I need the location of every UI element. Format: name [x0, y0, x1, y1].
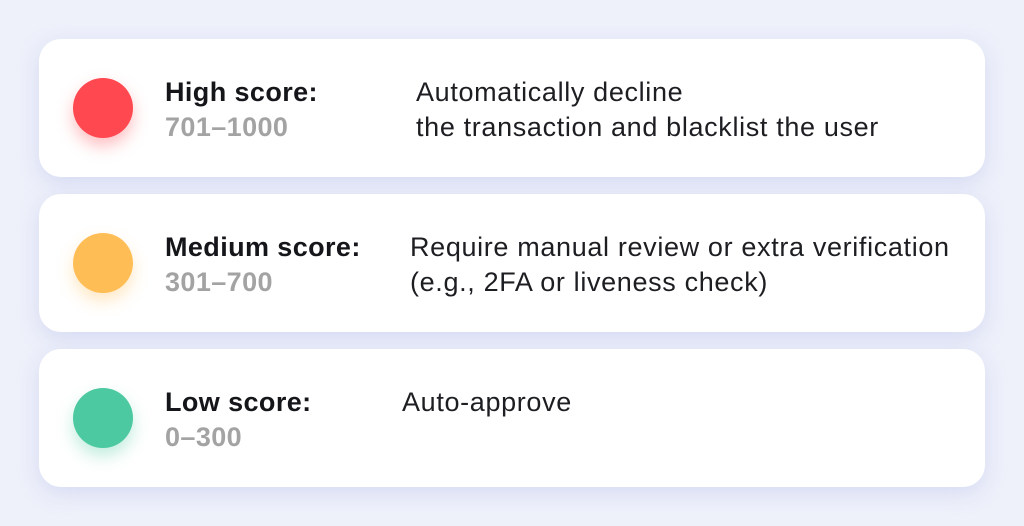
icon: red dot [73, 78, 133, 138]
icon: green dot [73, 388, 133, 448]
description: high: the transaction and blacklist the user [416, 112, 879, 142]
label: medium score [165, 232, 361, 297]
label: low score: Low score: [165, 387, 312, 417]
card: medium score [39, 194, 985, 332]
card: high score [39, 39, 985, 177]
description: low: Auto-approve [402, 387, 572, 417]
description: high: Automatically decline [416, 77, 683, 107]
description: medium [410, 232, 950, 297]
label: low score [165, 387, 312, 452]
label: low score: 0–300 [165, 422, 242, 452]
label: medium score: 301–700 [165, 267, 273, 297]
description: medium: Require manual review or extra verification [410, 232, 950, 262]
label: high score [165, 77, 318, 142]
card: low score [39, 349, 985, 487]
icon: orange dot [73, 233, 133, 293]
label: high score: High score: [165, 77, 318, 107]
label: high score: 701–1000 [165, 112, 288, 142]
description: high [416, 77, 879, 142]
description: medium: (e.g., 2FA or liveness check) [410, 267, 768, 297]
label: medium score: Medium score: [165, 232, 361, 262]
